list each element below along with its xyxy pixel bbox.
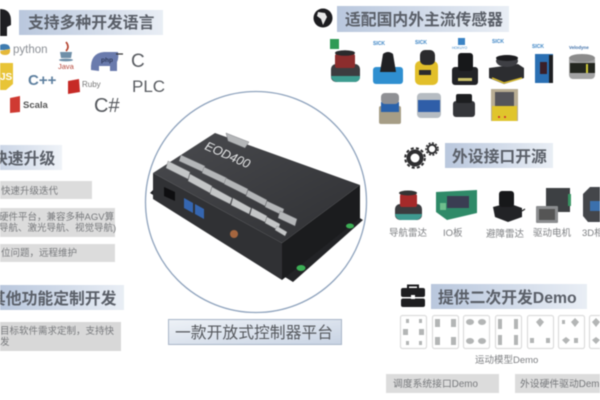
icon: head silhouette <box>0 9 11 36</box>
icon: gears <box>405 143 438 168</box>
item: navigation lidar <box>389 190 428 239</box>
heading: demo <box>431 284 587 309</box>
panel: supported languages <box>0 9 165 117</box>
USB ports <box>184 198 204 219</box>
heading: languages: 支持多种开发语言 <box>28 13 155 32</box>
sensor 6: blue photoelectric <box>532 44 553 83</box>
heading: peripherals <box>445 143 553 168</box>
text block: custom requirements <box>0 322 121 351</box>
sensor 7: velodyne cylinder: Velodyne <box>569 45 589 50</box>
sensor 2: blue lidar <box>373 41 403 84</box>
mounting flange <box>150 190 363 282</box>
text block: remote maintenance: 位问题，远程维护 <box>1 247 77 259</box>
sensor 9: silver blue cylinder <box>417 93 441 118</box>
icon: php elephant: php <box>101 57 113 64</box>
heading: languages <box>19 10 163 35</box>
sensor 7: velodyne cylinder <box>569 45 595 79</box>
item: obstacle lidar: 避障雷达 <box>486 228 525 240</box>
item: IO board <box>436 190 477 239</box>
label: C++: C++ <box>28 72 57 89</box>
sensor 3: yellow lidar: SICK <box>415 40 427 46</box>
panel: rapid upgrade <box>0 145 116 262</box>
circle frame <box>146 92 366 312</box>
device name: EOD400 <box>203 139 252 171</box>
heading: demo: 提供二次开发Demo <box>438 288 577 307</box>
item: IO board: IO板 <box>443 227 463 239</box>
connector row front <box>166 161 287 236</box>
tile 1 <box>400 316 426 348</box>
label: PLC: PLC <box>132 77 165 96</box>
sensor 10: black cylinder <box>453 94 475 117</box>
icon: globe <box>314 8 332 28</box>
icon: php elephant <box>91 52 123 71</box>
sensor 4: black lidar: HOKUYO <box>452 46 467 50</box>
heading: sensors <box>337 6 509 32</box>
demo tiles: motion models <box>400 316 600 348</box>
tile 5 <box>528 316 554 348</box>
item: drive motor <box>533 188 572 239</box>
sensor 8: gray blue scanner <box>379 93 401 124</box>
text block: dispatch interface demo <box>386 374 499 393</box>
item: drive motor: 驱动电机 <box>533 227 572 239</box>
sensor 5: wide safety scanner <box>489 39 524 84</box>
text block: hardware platform: 硬件平台，兼容多种AGV算 <box>0 211 114 223</box>
icon: ruby logo <box>68 79 101 94</box>
caption: 一款开放式控制器平台 <box>175 324 333 342</box>
label: C sharp: C# <box>94 95 120 117</box>
text block: custom requirements: 发 <box>0 336 10 348</box>
panel: open peripheral interfaces <box>389 143 600 240</box>
connector row rear <box>179 133 297 226</box>
tile 3 <box>464 316 490 348</box>
sensor 2: blue lidar: SICK <box>373 41 385 47</box>
icon: briefcase <box>401 286 425 307</box>
caption <box>168 320 342 344</box>
text block: hardware platform <box>0 208 116 237</box>
heading: sensors: 适配国内外主流传感器 <box>345 10 503 29</box>
panel: central controller <box>146 92 366 344</box>
item: obstacle lidar <box>486 191 525 240</box>
tile 4 <box>496 316 522 348</box>
sensor 3: yellow lidar <box>415 40 438 85</box>
icon: java logo <box>58 42 75 71</box>
text block: iteration: 快速升级迭代 <box>1 185 59 197</box>
ethernet port <box>164 187 175 201</box>
icon: scala logo <box>10 96 49 113</box>
green mounting dots <box>296 224 354 271</box>
panel: custom development <box>0 285 124 351</box>
item: 3D camera <box>582 187 600 239</box>
sensor 11: yellow framed scanner <box>491 89 518 121</box>
icon: java logo: Java <box>58 62 75 71</box>
device: EOD400 controller <box>150 133 363 282</box>
heading: peripherals: 外设接口开源 <box>452 147 547 166</box>
label: motion model demo: 运动模型Demo <box>475 354 538 366</box>
sensor 1: red lidar <box>330 39 360 82</box>
icon: javascript logo: JS <box>0 72 13 83</box>
sensor 6: blue photoelectric: SICK <box>532 44 544 50</box>
tile 2 <box>432 316 458 348</box>
icon: python logo: python <box>13 44 48 56</box>
item: navigation lidar: 导航雷达 <box>389 227 428 239</box>
antenna connector <box>230 230 238 238</box>
icon: scala logo: Scala <box>23 100 49 111</box>
text block: custom requirements: 目标软件需求定制，支持快 <box>0 325 115 337</box>
text block: dispatch interface demo: 调度系统接口Demo <box>393 377 478 390</box>
panel: secondary development demo <box>386 284 600 393</box>
sensor 4: black lidar <box>452 38 478 85</box>
label: C: C <box>131 51 145 72</box>
front face <box>153 173 282 280</box>
panel: sensors <box>314 6 595 124</box>
sensor 5: wide safety scanner: SICK <box>492 39 504 45</box>
icon: javascript logo <box>0 63 13 90</box>
tile 7 <box>590 316 600 348</box>
icon: ruby logo: Ruby <box>82 80 101 89</box>
text block: hardware platform: 导航、激光导航、视觉导航) <box>0 222 116 234</box>
right face <box>282 185 360 280</box>
tile 6 <box>558 316 584 348</box>
top face <box>153 133 360 243</box>
text block: peripheral driver demo <box>515 374 600 393</box>
